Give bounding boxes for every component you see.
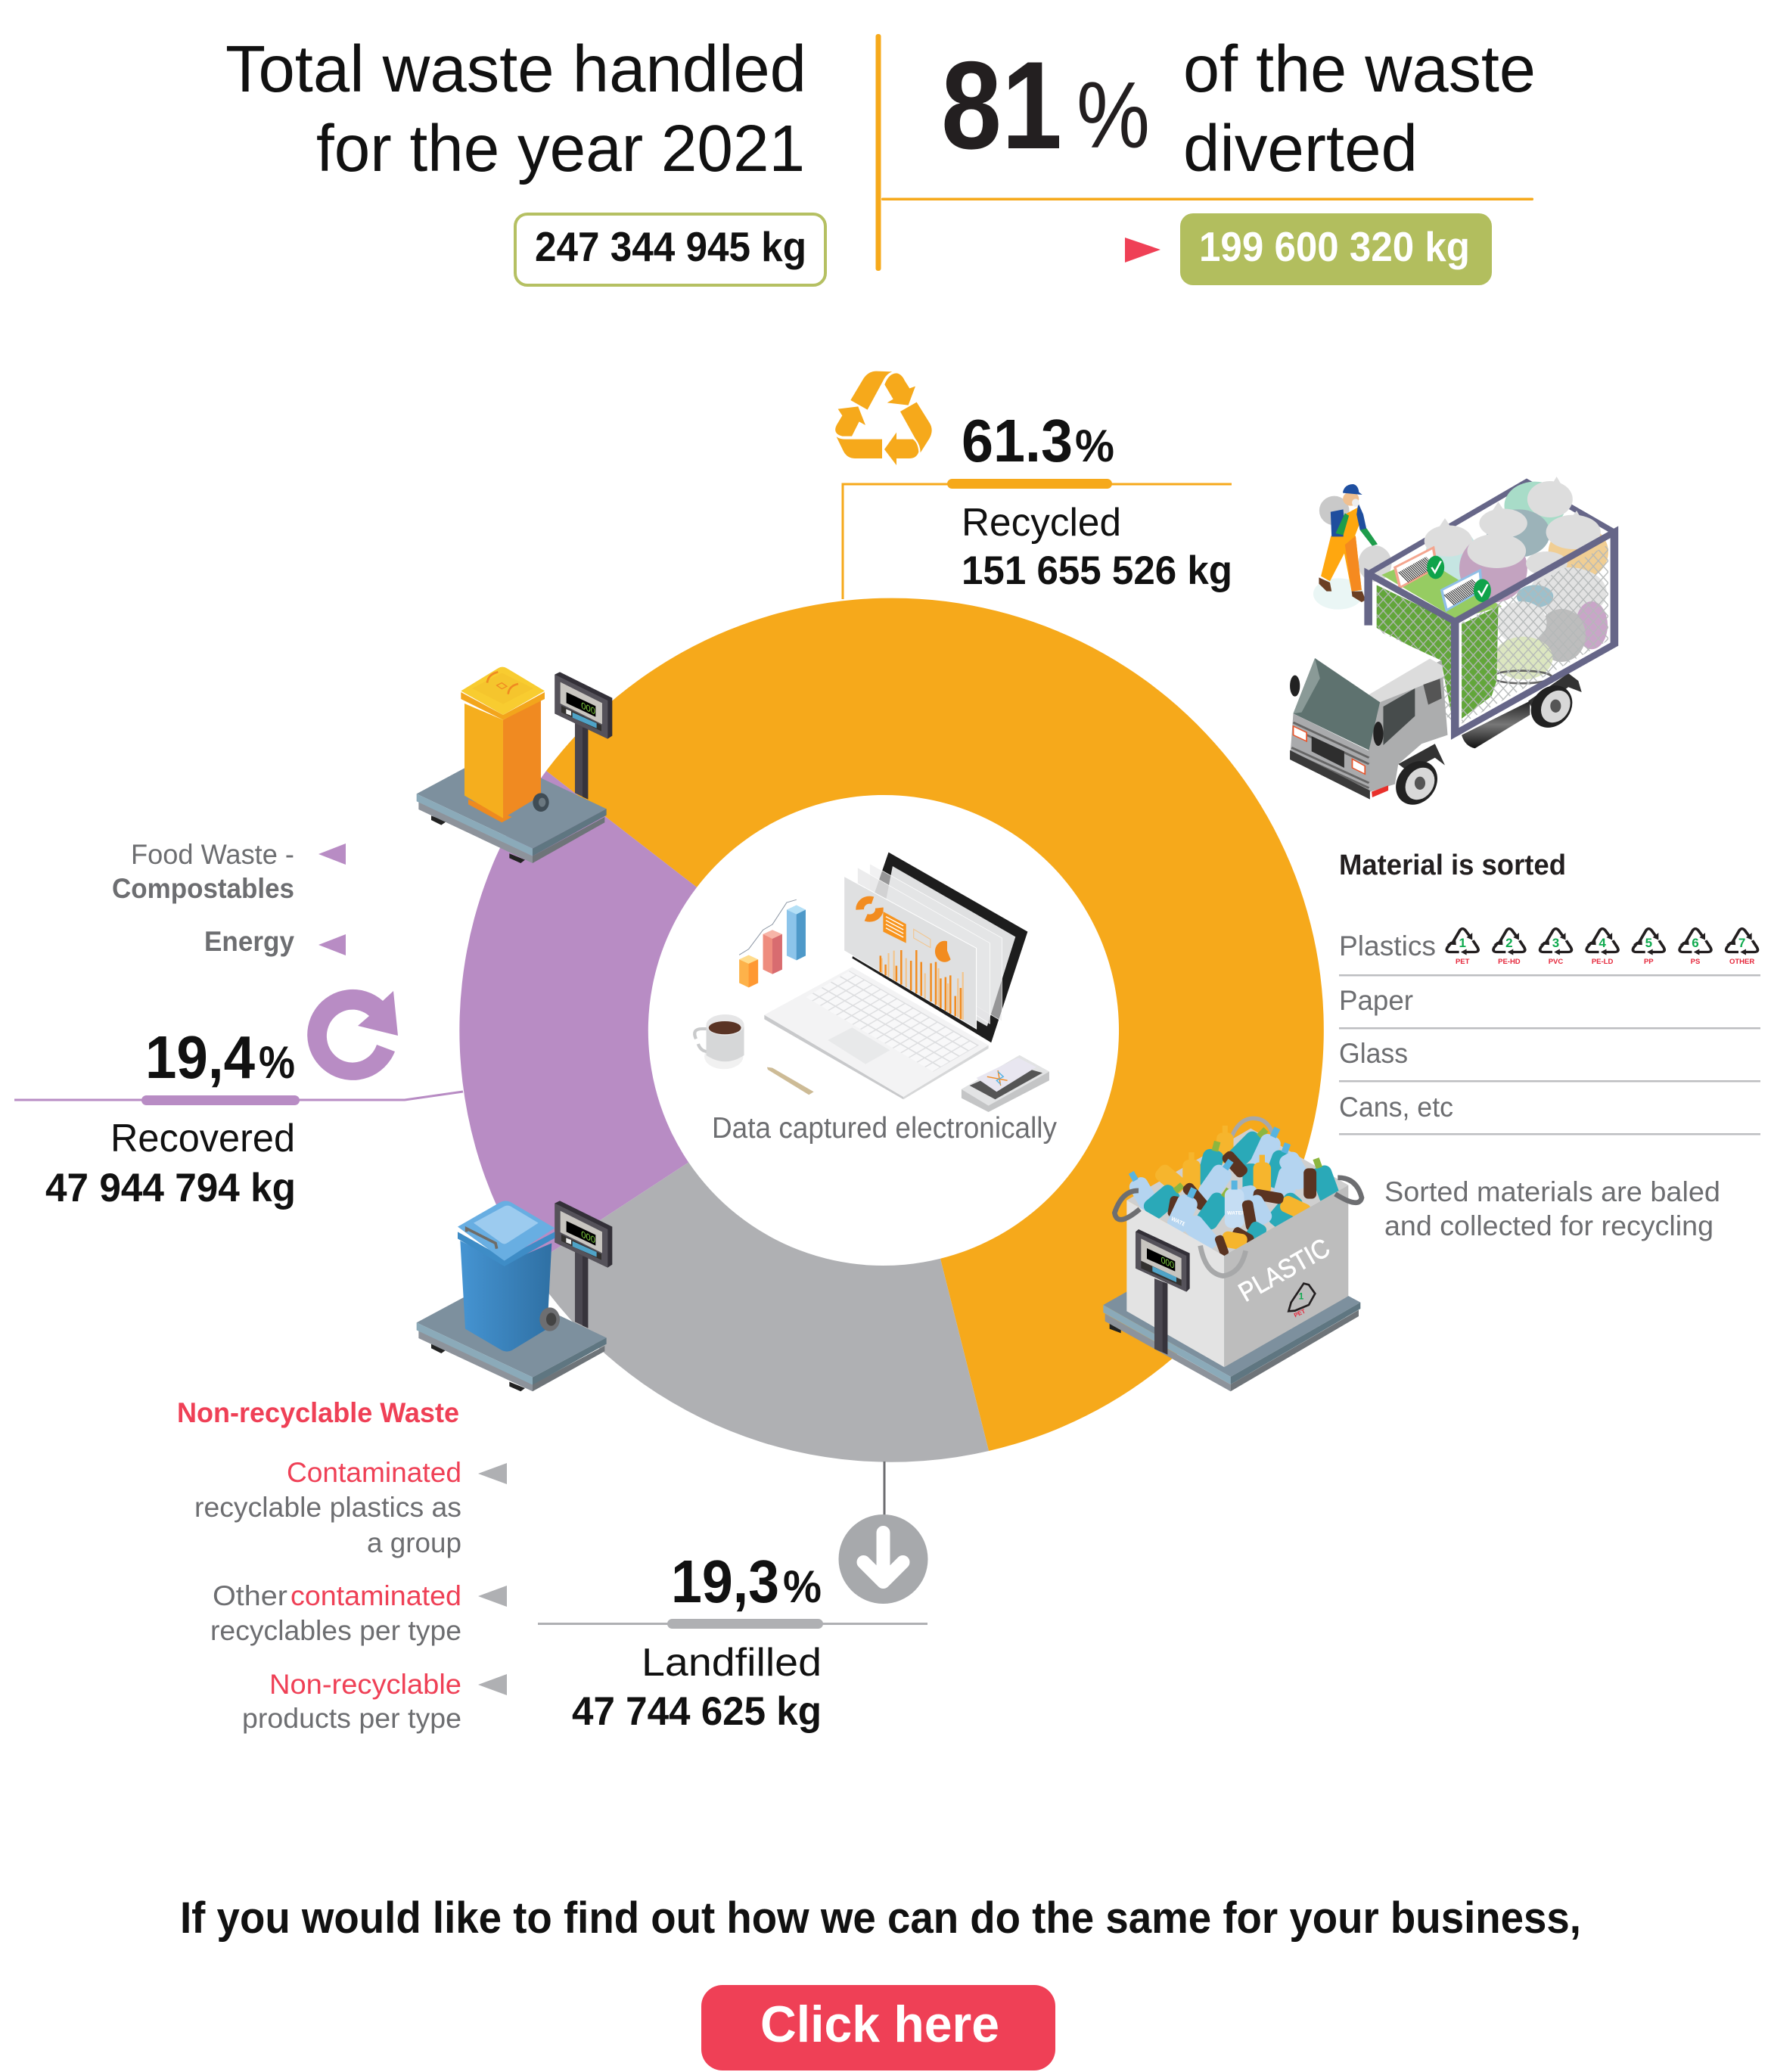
cage back frame	[1369, 482, 1614, 573]
scale display: 000	[581, 1229, 595, 1246]
back handle	[1231, 1118, 1273, 1140]
landfilled stat block	[538, 1548, 927, 1734]
recovered: energy label: Energy	[204, 926, 294, 957]
landfill detail: contaminated plastics: Contaminated	[287, 1457, 461, 1488]
heading: 81% of the waste diverted: 81	[941, 36, 1062, 175]
scale display: 000	[1161, 1255, 1174, 1271]
icon: OTHER	[1726, 929, 1757, 955]
recovered stat block: %	[259, 1037, 295, 1088]
icon: PP	[1633, 929, 1664, 955]
icon: down arrow circle	[838, 1514, 927, 1604]
recovered: food waste label	[112, 839, 346, 904]
resin labels: OTHER	[1729, 958, 1754, 966]
heading: 81% of the waste diverted: %	[1077, 64, 1150, 168]
rear wheel	[1525, 673, 1582, 732]
sorted materials list: Glass	[1339, 1038, 1408, 1069]
resin numbers: 3	[1552, 936, 1559, 950]
smartphone	[962, 1055, 1049, 1112]
landfill detail: non-recyclable products: products per type	[242, 1703, 461, 1734]
bale handles	[1114, 1178, 1362, 1276]
orange divider bar	[876, 34, 881, 271]
platform	[1103, 1233, 1360, 1391]
illustration: plastic bottles bale on scale	[1103, 1118, 1362, 1391]
baling note	[1384, 1176, 1720, 1241]
recovered stat block: 47 944 794 kg	[45, 1166, 296, 1210]
recycled stat block: %	[1075, 421, 1114, 471]
recovered stat block: 19,4	[145, 1024, 255, 1091]
icon: PVC	[1540, 929, 1571, 955]
PET resin mark	[1288, 1284, 1315, 1319]
fuel tank	[1462, 701, 1530, 748]
sorted materials list: Cans, etc	[1339, 1092, 1453, 1123]
resin numbers: 2	[1505, 936, 1513, 950]
scale platform	[417, 754, 607, 863]
bottles	[1123, 1122, 1342, 1257]
blue bin	[458, 1201, 560, 1352]
recycled stat block: 61.3	[962, 407, 1073, 474]
illustration: orange bin on scale	[417, 667, 612, 863]
landfilled stat block: Landfilled	[642, 1641, 822, 1685]
landfill detail: contaminated plastics: a group	[367, 1527, 461, 1558]
red pointer arrow	[1125, 238, 1160, 262]
recovered: food waste label: Food Waste -	[131, 839, 294, 870]
resin numbers: 5	[1645, 936, 1652, 950]
heading: total waste handled: for the year 2021	[316, 112, 805, 185]
sorted materials list	[1339, 930, 1760, 1135]
illustration: worker and truck with cage	[1290, 477, 1614, 808]
click here button	[701, 1985, 1055, 2070]
cage mesh	[1377, 545, 1608, 724]
recovered stat block: Recovered	[110, 1117, 295, 1160]
recycled stat block: Recycled	[962, 501, 1121, 545]
orange bin	[461, 667, 549, 822]
heading: total waste handled: Total waste handled	[225, 33, 806, 106]
total tonnage box: 247 344 945 kg	[535, 223, 806, 270]
icon: PS	[1679, 929, 1711, 955]
click here button: Click here	[760, 1996, 999, 2053]
landfill detail: other contaminated recyclables	[210, 1580, 507, 1646]
heading: total waste handled	[225, 33, 806, 185]
heading: 81% of the waste diverted: diverted	[1183, 112, 1418, 185]
resin labels: PS	[1691, 958, 1700, 966]
baling note: and collected for recycling	[1384, 1210, 1714, 1241]
green bins	[1377, 558, 1502, 719]
landfill detail: non-recyclable products: Non-recyclable	[269, 1669, 461, 1700]
bottles: WATER	[1227, 1210, 1245, 1216]
resin numbers: 7	[1738, 936, 1745, 950]
icon: PE-HD	[1493, 929, 1525, 955]
recovered stat block	[14, 1024, 463, 1210]
resin labels: PET	[1456, 958, 1470, 966]
segment: recovered 19.4%	[459, 771, 697, 1266]
heading: 81% of the waste diverted: of the waste	[1183, 33, 1536, 106]
sorted materials list: Plastics	[1339, 930, 1436, 961]
recovered: food waste label: Compostables	[112, 873, 294, 904]
landfill detail: other contaminated recyclables: recyclables per type	[210, 1615, 461, 1646]
landfilled stat block: 47 744 625 kg	[572, 1689, 822, 1734]
cage front frame	[1369, 532, 1614, 734]
barcode labels	[1395, 548, 1491, 610]
diverted tonnage box: 199 600 320 kg	[1199, 223, 1470, 270]
bale faces	[1126, 1185, 1348, 1367]
PLASTIC label: PLASTIC	[1234, 1233, 1335, 1308]
scale display	[555, 672, 612, 800]
donut chart	[459, 598, 1324, 1462]
orange divider line	[881, 198, 1533, 200]
scale display	[555, 1201, 612, 1328]
cab	[1290, 626, 1448, 800]
front wheel	[1390, 744, 1445, 808]
resin numbers	[1459, 936, 1745, 950]
bottles: WATER	[1170, 1215, 1192, 1230]
plastic resin code icons	[1446, 929, 1757, 966]
material is sorted heading: Material is sorted	[1339, 850, 1566, 881]
resin labels	[1456, 958, 1754, 966]
diverted tonnage box	[1180, 213, 1492, 285]
laptop screen	[844, 853, 1027, 1042]
bale interior	[1126, 1129, 1348, 1256]
data capture caption: Data captured electronically	[712, 1112, 1057, 1145]
icon: purple circular arrow	[307, 989, 398, 1080]
illustration: laptop with data	[694, 853, 1049, 1112]
scale display: 000	[581, 701, 595, 717]
scale platform	[417, 1283, 607, 1391]
recycled stat block	[843, 407, 1232, 599]
icon: recycling arrows	[835, 371, 932, 465]
landfilled stat block: %	[783, 1561, 822, 1612]
total tonnage box	[515, 214, 825, 285]
PET resin mark: 1	[1299, 1291, 1304, 1302]
resin numbers: 6	[1692, 936, 1699, 950]
landfill detail: other contaminated recyclables: contaminated	[291, 1580, 461, 1611]
icon: PE-LD	[1586, 929, 1618, 955]
PET resin mark: PET	[1293, 1308, 1307, 1319]
landfill detail: non-recyclable products	[242, 1669, 507, 1734]
resin labels: PE-LD	[1592, 958, 1613, 966]
resin numbers: 4	[1599, 936, 1606, 950]
3D bars and trend line	[739, 899, 806, 987]
recycled stat block: 151 655 526 kg	[962, 548, 1232, 593]
resin labels: PP	[1644, 958, 1654, 966]
worker	[1313, 484, 1392, 610]
pencil	[767, 1067, 814, 1095]
heading: 81% of the waste diverted	[941, 33, 1536, 185]
call to action text: If you would like to find out how we can do the same for your business,	[180, 1893, 1581, 1943]
icon: PET	[1446, 929, 1478, 955]
resin numbers: 1	[1459, 936, 1466, 950]
scale display	[1136, 1229, 1190, 1355]
landfilled stat block: 19,3	[671, 1548, 779, 1615]
non-recyclable waste heading: Non-recyclable Waste	[177, 1397, 459, 1428]
coffee mug	[694, 1014, 744, 1069]
recovered: energy label	[204, 926, 346, 957]
segment: landfilled 19.3%	[530, 1162, 989, 1462]
resin labels: PVC	[1549, 958, 1563, 966]
illustration: blue bin on scale	[417, 1201, 612, 1391]
landfill detail: contaminated plastics	[194, 1457, 507, 1558]
landfill detail: contaminated plastics: recyclable plastics as	[194, 1492, 461, 1523]
resin labels: PE-HD	[1498, 958, 1521, 966]
waste bags	[1425, 477, 1608, 683]
baling note: Sorted materials are baled	[1384, 1176, 1720, 1207]
landfill detail: other contaminated recyclables: Other	[213, 1580, 287, 1611]
segment: recycled 61.3%	[546, 598, 1324, 1451]
sorted materials list: Paper	[1339, 985, 1413, 1016]
screen charts	[860, 900, 963, 1020]
connector line to landfill icon	[884, 1462, 885, 1516]
laptop base	[764, 967, 989, 1099]
